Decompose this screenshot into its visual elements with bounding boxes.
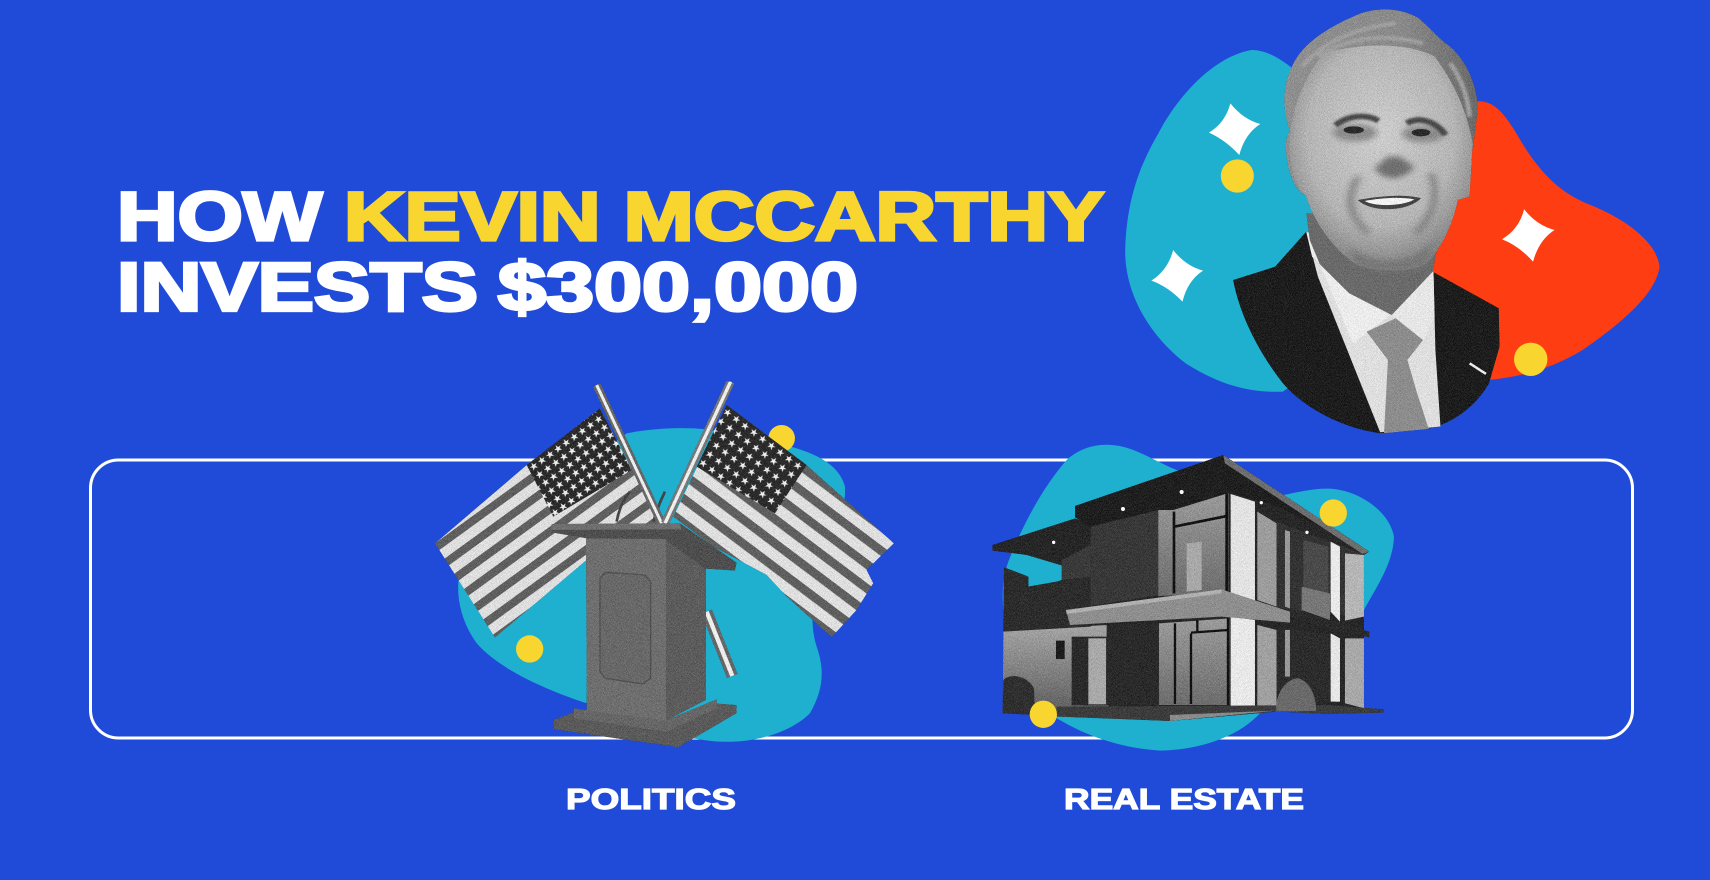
yellow dot left — [1030, 701, 1057, 728]
hair — [1284, 9, 1478, 150]
politics illustration — [435, 382, 894, 747]
sliding door — [1072, 637, 1107, 705]
sparkle 3 — [1502, 209, 1554, 262]
lower glass — [1159, 618, 1229, 705]
left roof — [992, 518, 1091, 567]
balcony wall — [1003, 567, 1091, 632]
nose shadow — [1374, 157, 1414, 178]
teeth — [1365, 198, 1414, 205]
right flag — [673, 405, 894, 637]
face — [1289, 46, 1473, 270]
title line 1: HOW — [117, 178, 323, 255]
label: real estate: REAL ESTATE — [1064, 784, 1304, 816]
title line 1: KEVIN MCCARTHY — [344, 178, 1104, 255]
left bush — [1003, 676, 1035, 715]
orange blob — [1431, 101, 1660, 380]
yellow dot right — [1320, 499, 1347, 527]
hair streaks — [1302, 23, 1470, 117]
upper central wall — [1091, 508, 1160, 606]
left pole — [597, 385, 732, 676]
label: politics: POLITICS — [566, 784, 736, 816]
top slab — [552, 523, 737, 571]
teal blob — [458, 428, 845, 742]
jacket — [1233, 232, 1500, 433]
lower left wall — [1003, 625, 1108, 713]
collar left — [1306, 232, 1390, 343]
title line 2: INVESTS — [117, 248, 478, 326]
yellow dot left — [516, 635, 543, 663]
podium — [552, 523, 737, 747]
mouth — [1358, 196, 1421, 209]
house silhouette — [1003, 455, 1383, 721]
yellow dot on orange — [1514, 343, 1547, 376]
real estate illustration — [992, 445, 1394, 751]
collar right — [1392, 272, 1435, 341]
small window — [1056, 641, 1065, 659]
main roof — [1052, 455, 1369, 554]
shirt — [1306, 232, 1440, 432]
lower central wall — [1107, 623, 1160, 705]
neck — [1306, 213, 1442, 315]
front — [586, 537, 667, 721]
eyes — [1344, 126, 1364, 134]
right bush — [1276, 678, 1316, 712]
upper left window — [1062, 545, 1091, 580]
floor slab — [1066, 589, 1369, 637]
lapel pin — [1470, 363, 1486, 374]
left flag — [435, 408, 660, 638]
sparkle 1 — [1209, 103, 1260, 155]
sparkle 2 — [1151, 250, 1203, 302]
upper glass — [1158, 492, 1228, 596]
eye sockets — [1332, 124, 1377, 141]
ear — [1286, 127, 1318, 195]
title line 2: $300,000 — [498, 248, 858, 326]
yellow dot on teal — [1221, 159, 1254, 193]
portrait illustration — [1125, 9, 1660, 433]
teal blob — [1125, 50, 1333, 392]
panel inset — [600, 572, 651, 684]
right pole — [665, 382, 731, 523]
title — [117, 178, 1104, 326]
man — [1233, 9, 1500, 433]
microphones — [617, 492, 665, 522]
facial shading — [1332, 124, 1444, 271]
lower right panels — [1231, 617, 1364, 708]
side — [666, 535, 706, 721]
tie — [1367, 318, 1429, 433]
title line 1 — [117, 178, 1104, 255]
title line 2 — [117, 248, 858, 326]
rounded frame panel — [90, 460, 1632, 738]
teal blob — [1003, 445, 1394, 751]
eyebrows — [1335, 116, 1446, 135]
chin shadow — [1349, 240, 1435, 271]
upper white panels — [1231, 494, 1364, 622]
smile folds — [1351, 173, 1435, 233]
deck — [1057, 705, 1383, 721]
yellow dot top — [768, 425, 795, 452]
base lower — [553, 703, 737, 747]
base upper — [574, 699, 717, 732]
